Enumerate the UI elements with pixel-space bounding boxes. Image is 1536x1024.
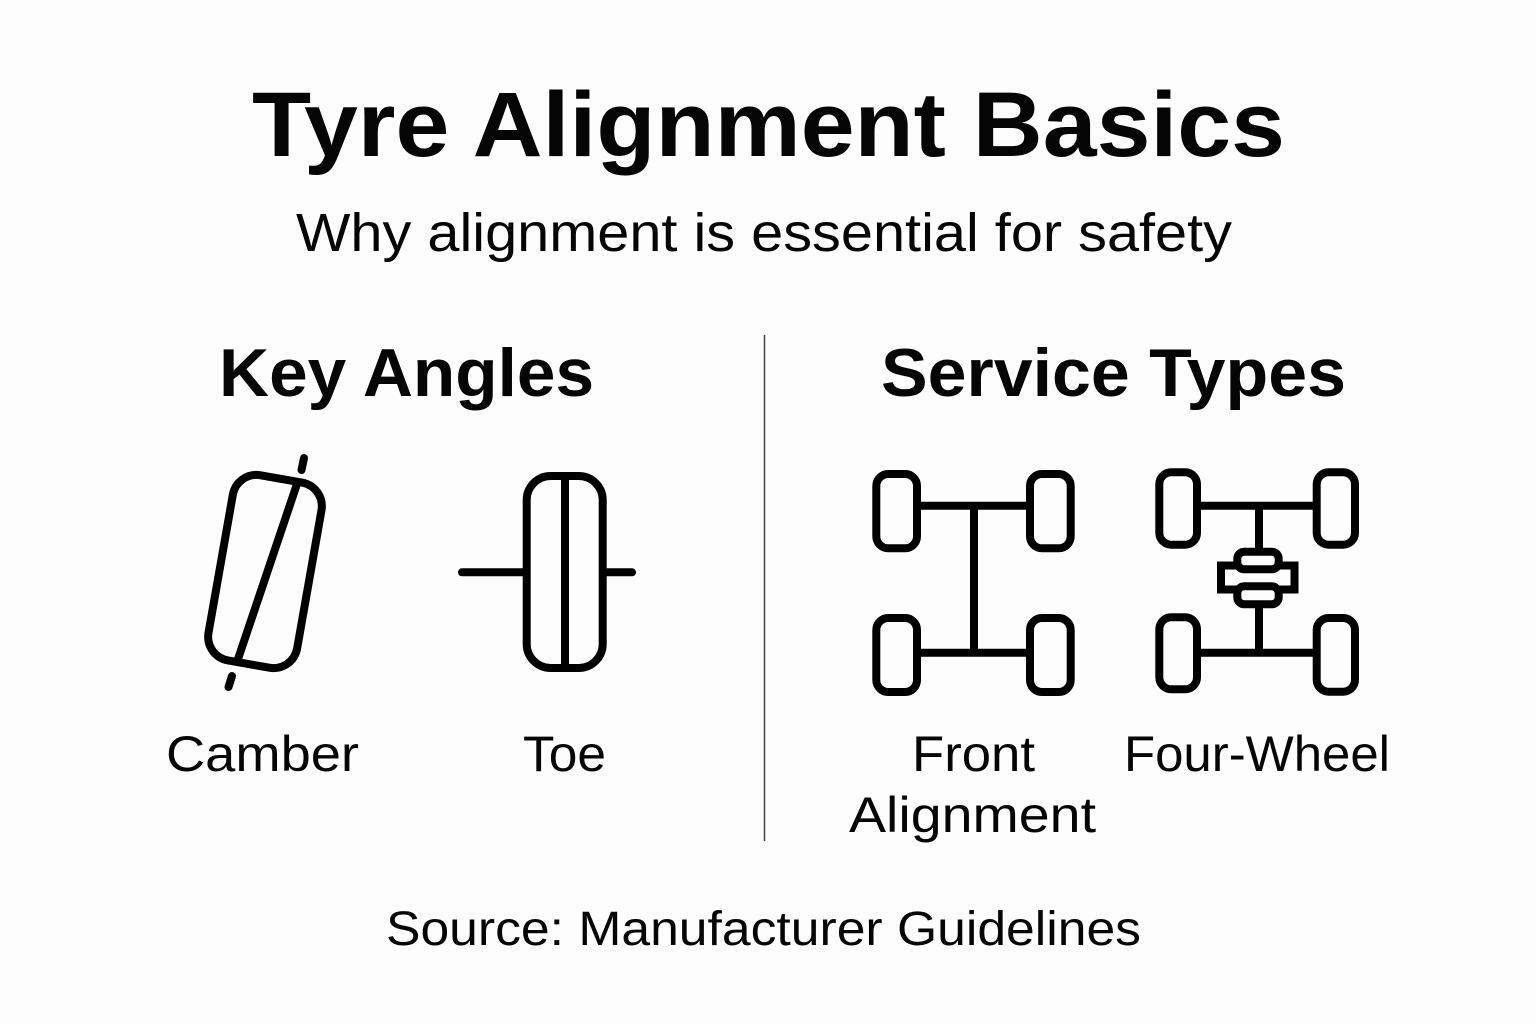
divider [764,335,766,841]
icon: camber wheel [204,458,326,687]
subtitle: Why alignment is essential for safety [296,203,1232,263]
panel: key angles [166,335,632,782]
label: front alignment [849,726,1096,843]
icon: four-wheel chassis [1159,472,1355,692]
label: front alignment: Alignment [849,787,1096,843]
source note: Source: Manufacturer Guidelines [386,903,1141,956]
label: toe: Toe [523,726,606,782]
label: four-wheel: Four-Wheel [1124,726,1390,782]
title: Tyre Alignment Basics [252,74,1285,176]
label: front alignment: Front [912,726,1035,782]
heading: service types: Service Types [881,335,1346,411]
icon: toe wheel [462,476,632,668]
panel: service types [849,335,1390,843]
icon: front alignment chassis [876,474,1071,692]
heading: key angles: Key Angles [219,335,594,411]
label: camber: Camber [166,726,359,782]
